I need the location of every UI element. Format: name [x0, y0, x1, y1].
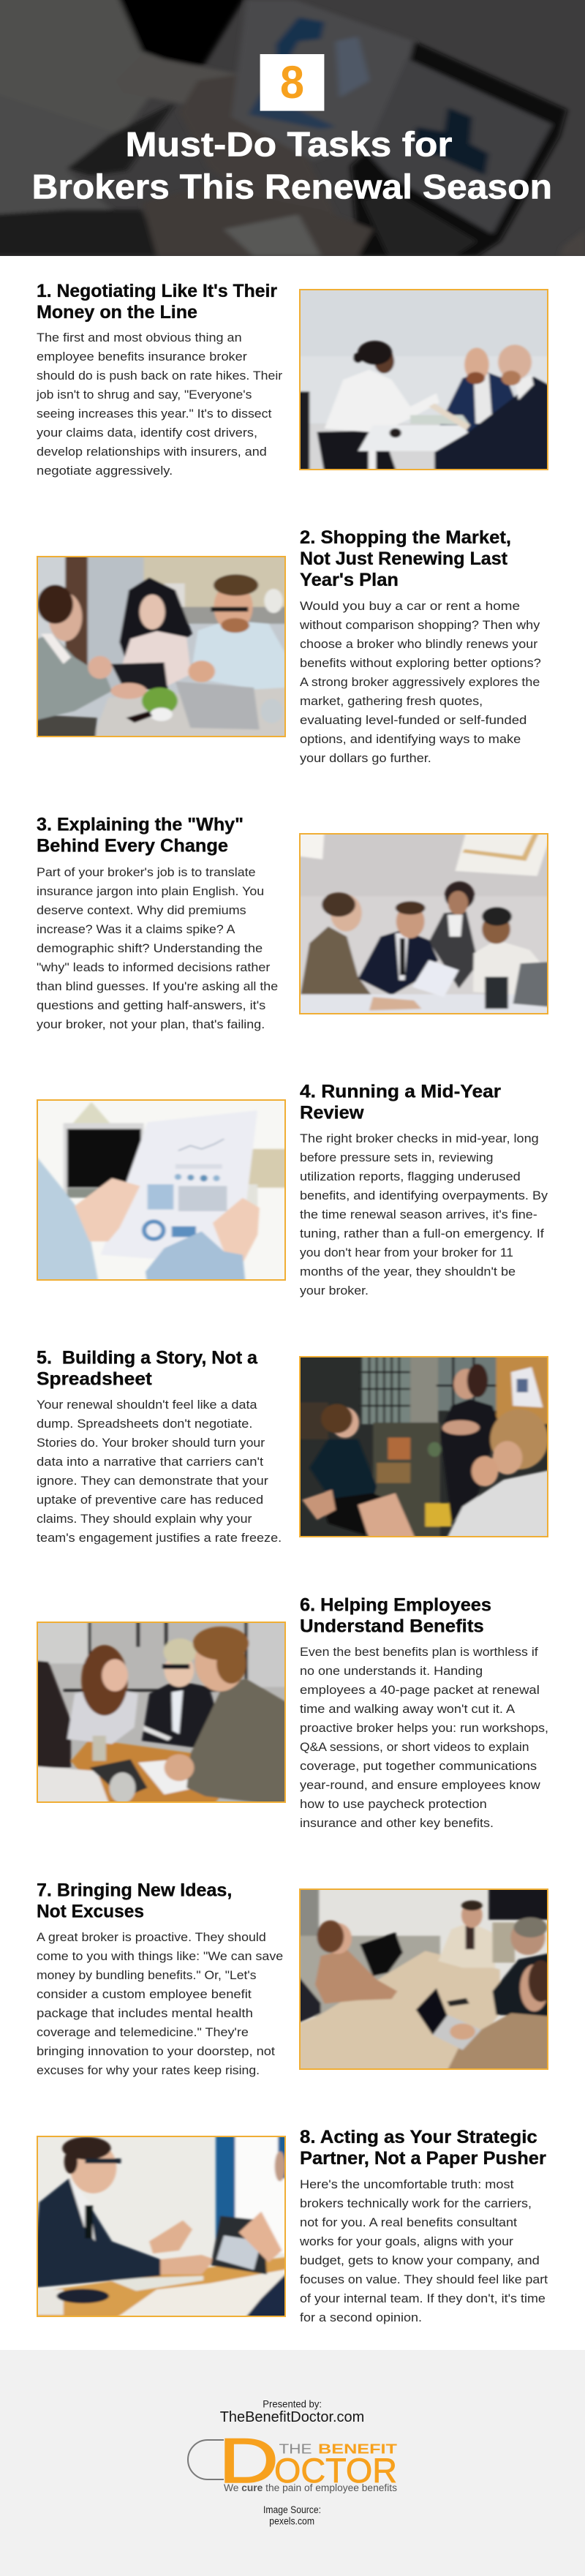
text block: task 3: demographic shift? Understanding the	[37, 941, 263, 955]
text block: task 3: insurance jargon into plain English. You	[37, 884, 264, 898]
heading: task 3: 3. Explaining the "Why"	[37, 815, 244, 835]
text block: task 6: year-round, and ensure employees know	[300, 1778, 541, 1792]
text block: task 4: your broker.	[300, 1284, 369, 1298]
heading: task 7: Not Excuses	[37, 1902, 144, 1922]
text block: task 7	[37, 1930, 283, 2077]
text block: task 4: the time renewal season arrives, it's fine-	[300, 1208, 537, 1221]
text block: task 3: than blind guesses. If you're asking all the	[37, 979, 278, 993]
number badge: 8	[280, 57, 304, 108]
text block: task 8: works for your goals, aligns with your	[299, 2234, 513, 2248]
text block: task 5: team's engagement justifies a rate freeze.	[37, 1531, 282, 1545]
photo: colleagues around orange table	[31, 1620, 290, 1807]
heading: task 3: Behind Every Change	[37, 835, 228, 856]
text block: task 3: your broker, not your plan, that's failing.	[37, 1017, 265, 1031]
logo: The Benefit Doctor: D	[219, 2426, 279, 2496]
heading: task 2: Year's Plan	[300, 570, 399, 590]
text block: task 5: Your renewal shouldn't feel like a data	[37, 1398, 257, 1412]
presented by: Presented by:	[263, 2399, 322, 2409]
text block: task 8: brokers technically work for the carriers,	[300, 2196, 532, 2210]
text block: task 4	[300, 1131, 548, 1298]
text block: task 1: your claims data, identify cost drivers,	[37, 426, 257, 440]
text block: task 3	[37, 865, 278, 1031]
heading: task 8: Partner, Not a Paper Pusher	[300, 2148, 546, 2169]
heading: task 2	[300, 527, 511, 590]
image source: Image Source:	[263, 2504, 321, 2515]
text block: task 4: tuning, rather than a full-on emergency. If	[300, 1227, 544, 1240]
text block: task 5: ignore. They can demonstrate that your	[37, 1474, 268, 1488]
heading: task 4	[300, 1081, 501, 1123]
panel: task 6	[31, 1594, 548, 1830]
text block: task 1: job isn't to shrug and say, "Everyone's	[36, 388, 252, 402]
title: Brokers This Renewal Season	[32, 167, 552, 206]
text block: task 7: consider a custom employee benefit	[37, 1987, 252, 2001]
header banner	[0, 0, 585, 256]
text block: task 5: claims. They should explain why your	[37, 1512, 252, 1526]
text block: task 6	[300, 1645, 548, 1830]
panel: task 2	[31, 527, 541, 765]
text block: task 1: develop relationships with insurers, and	[37, 445, 267, 459]
photo: three people at a tablet	[31, 553, 290, 739]
heading: task 2: 2. Shopping the Market,	[300, 527, 511, 548]
text block: task 6: employees a 40-page packet at renewal	[300, 1683, 540, 1697]
panel: task 1	[36, 281, 556, 478]
text block: task 5: dump. Spreadsheets don't negotiate.	[37, 1417, 252, 1431]
logo: The Benefit Doctor: We cure the pain of employee benefits	[224, 2482, 397, 2493]
heading: task 6: Understand Benefits	[300, 1616, 484, 1637]
text block: task 5: data into a narrative that carriers can't	[37, 1455, 263, 1469]
text block: task 8: of your internal team. If they don't, it's time	[300, 2291, 546, 2305]
panel: task 4	[31, 1081, 548, 1298]
text block: task 4: you don't hear from your broker for 11	[300, 1246, 513, 1259]
photo: consultant with client	[31, 2134, 291, 2321]
text block: task 5	[37, 1398, 282, 1545]
text block: task 7: excuses for why your rates keep rising.	[37, 2063, 260, 2077]
text block: task 6: proactive broker helps you: run workshops,	[300, 1721, 548, 1735]
image source	[263, 2504, 321, 2526]
title	[32, 124, 552, 206]
number badge	[260, 54, 324, 111]
text block: task 2: A strong broker aggressively explores the	[300, 675, 540, 689]
heading: task 5	[37, 1347, 258, 1390]
text block: task 5: uptake of preventive care has reduced	[37, 1493, 263, 1507]
text block: task 6: no one understands it. Handing	[300, 1664, 483, 1678]
image source: pexels.com	[269, 2516, 314, 2526]
heading: task 7	[37, 1880, 232, 1922]
heading: task 6: 6. Helping Employees	[300, 1594, 491, 1615]
photo: meeting at white table	[295, 289, 556, 474]
panel: task 3	[37, 815, 556, 1031]
panel: task 7	[37, 1880, 554, 2077]
text block: task 7: bringing innovation to your doorstep, not	[37, 2044, 275, 2058]
heading: task 2: Not Just Renewing Last	[300, 549, 508, 569]
heading: task 5: 5. Building a Story, Not a	[37, 1347, 258, 1368]
text block: task 8	[299, 2177, 548, 2324]
website: TheBenefitDoctor.com	[220, 2409, 364, 2425]
text block: task 1: should do is push back on rate hikes. Their	[37, 369, 283, 383]
text block: task 6: how to use paycheck protection	[300, 1797, 487, 1811]
text block: task 3: increase? Was it a claims spike? A	[37, 922, 235, 936]
panel: task 5	[37, 1347, 552, 1545]
text block: task 1: The first and most obvious thing an	[37, 331, 242, 344]
text block: task 4: The right broker checks in mid-year, long	[300, 1131, 539, 1145]
text block: task 6: coverage, put together communications	[300, 1759, 537, 1773]
text block: task 1: seeing increases this year." It's to dissect	[37, 407, 272, 421]
panel: task 8	[31, 2127, 548, 2324]
text block: task 8: not for you. A real benefits consultant	[300, 2215, 517, 2229]
text block: task 8: Here's the uncomfortable truth: most	[300, 2177, 514, 2191]
heading: task 8: 8. Acting as Your Strategic	[300, 2127, 537, 2147]
photo: hands holding report	[31, 1099, 290, 1285]
text block: task 2: Would you buy a car or rent a home	[300, 599, 520, 613]
text block: task 7: package that includes mental health	[37, 2006, 253, 2020]
footer	[0, 2350, 585, 2576]
text block: task 7: A great broker is proactive. They should	[37, 1930, 266, 1944]
text block: task 2	[299, 599, 541, 765]
text block: task 3: questions and getting half-answers, it's	[37, 998, 265, 1012]
text block: task 3: "why" leads to informed decisions rather	[37, 960, 271, 974]
text block: task 8: for a second opinion.	[300, 2311, 422, 2324]
text block: task 4: benefits, and identifying overpayments. By	[300, 1189, 548, 1202]
text block: task 2: your dollars go further.	[300, 751, 431, 765]
heading: task 1: 1. Negotiating Like It's Their	[37, 281, 277, 301]
text block: task 5: Stories do. Your broker should turn your	[37, 1436, 265, 1450]
photo: office presentation	[296, 1354, 552, 1540]
header background photo	[0, 0, 585, 256]
text block: task 2: without comparison shopping? Then why	[299, 618, 540, 632]
text block: task 2: market, gathering fresh quotes,	[300, 694, 483, 708]
text block: task 7: money by bundling benefits." Or, "Let's	[37, 1968, 256, 1982]
text block: task 3: deserve context. Why did premiums	[37, 903, 246, 917]
text block: task 6: time and walking away won't cut it. A	[300, 1702, 516, 1716]
logo: The Benefit Doctor: BENEFIT	[318, 2441, 397, 2456]
heading: task 3	[37, 815, 244, 856]
text block: task 4: utilization reports, flagging underused	[300, 1170, 521, 1183]
text block: task 1: employee benefits insurance broker	[37, 350, 247, 364]
heading: task 4: 4. Running a Mid-Year	[300, 1081, 501, 1101]
heading: task 8	[300, 2127, 546, 2169]
text block: task 1: negotiate aggressively.	[37, 464, 173, 478]
heading: task 4: Review	[300, 1103, 364, 1123]
logo: The Benefit Doctor: OCTOR	[274, 2451, 397, 2490]
heading: task 5: Spreadsheet	[37, 1369, 152, 1390]
heading: task 6	[300, 1594, 491, 1637]
photo: team reviewing documents	[295, 831, 556, 1018]
logo: The Benefit Doctor: THE	[279, 2441, 312, 2456]
text block: task 2: options, and identifying ways to make	[300, 732, 521, 746]
title: Must-Do Tasks for	[126, 124, 452, 164]
text block: task 2: benefits without exploring better options?	[300, 656, 541, 670]
text block: task 8: budget, gets to know your company, and	[300, 2253, 540, 2267]
text block: task 7: coverage and telemedicine." They're	[37, 2025, 249, 2039]
text block: task 2: choose a broker who blindly renews your	[300, 637, 538, 651]
text block: task 6: Q&A sessions, or short videos to explain	[300, 1740, 529, 1754]
text block: task 8: focuses on value. They should feel like part	[300, 2272, 548, 2286]
text block: task 3: Part of your broker's job is to translate	[37, 865, 256, 879]
text block: task 2: evaluating level-funded or self-funded	[300, 713, 526, 727]
logo: The Benefit Doctor	[188, 2426, 397, 2496]
text block: task 1	[36, 331, 283, 478]
text block: task 6: Even the best benefits plan is worthless if	[300, 1645, 538, 1659]
heading: task 1	[37, 281, 277, 323]
text block: task 4: before pressure sets in, reviewing	[300, 1150, 493, 1164]
text block: task 7: come to you with things like: "We can save	[37, 1949, 283, 1963]
text block: task 4: months of the year, they shouldn't be	[300, 1265, 516, 1278]
text block: task 6: insurance and other key benefits.	[300, 1816, 494, 1830]
heading: task 1: Money on the Line	[37, 302, 197, 323]
photo: boardroom meeting	[296, 1886, 554, 2074]
heading: task 7: 7. Bringing New Ideas,	[37, 1880, 232, 1900]
